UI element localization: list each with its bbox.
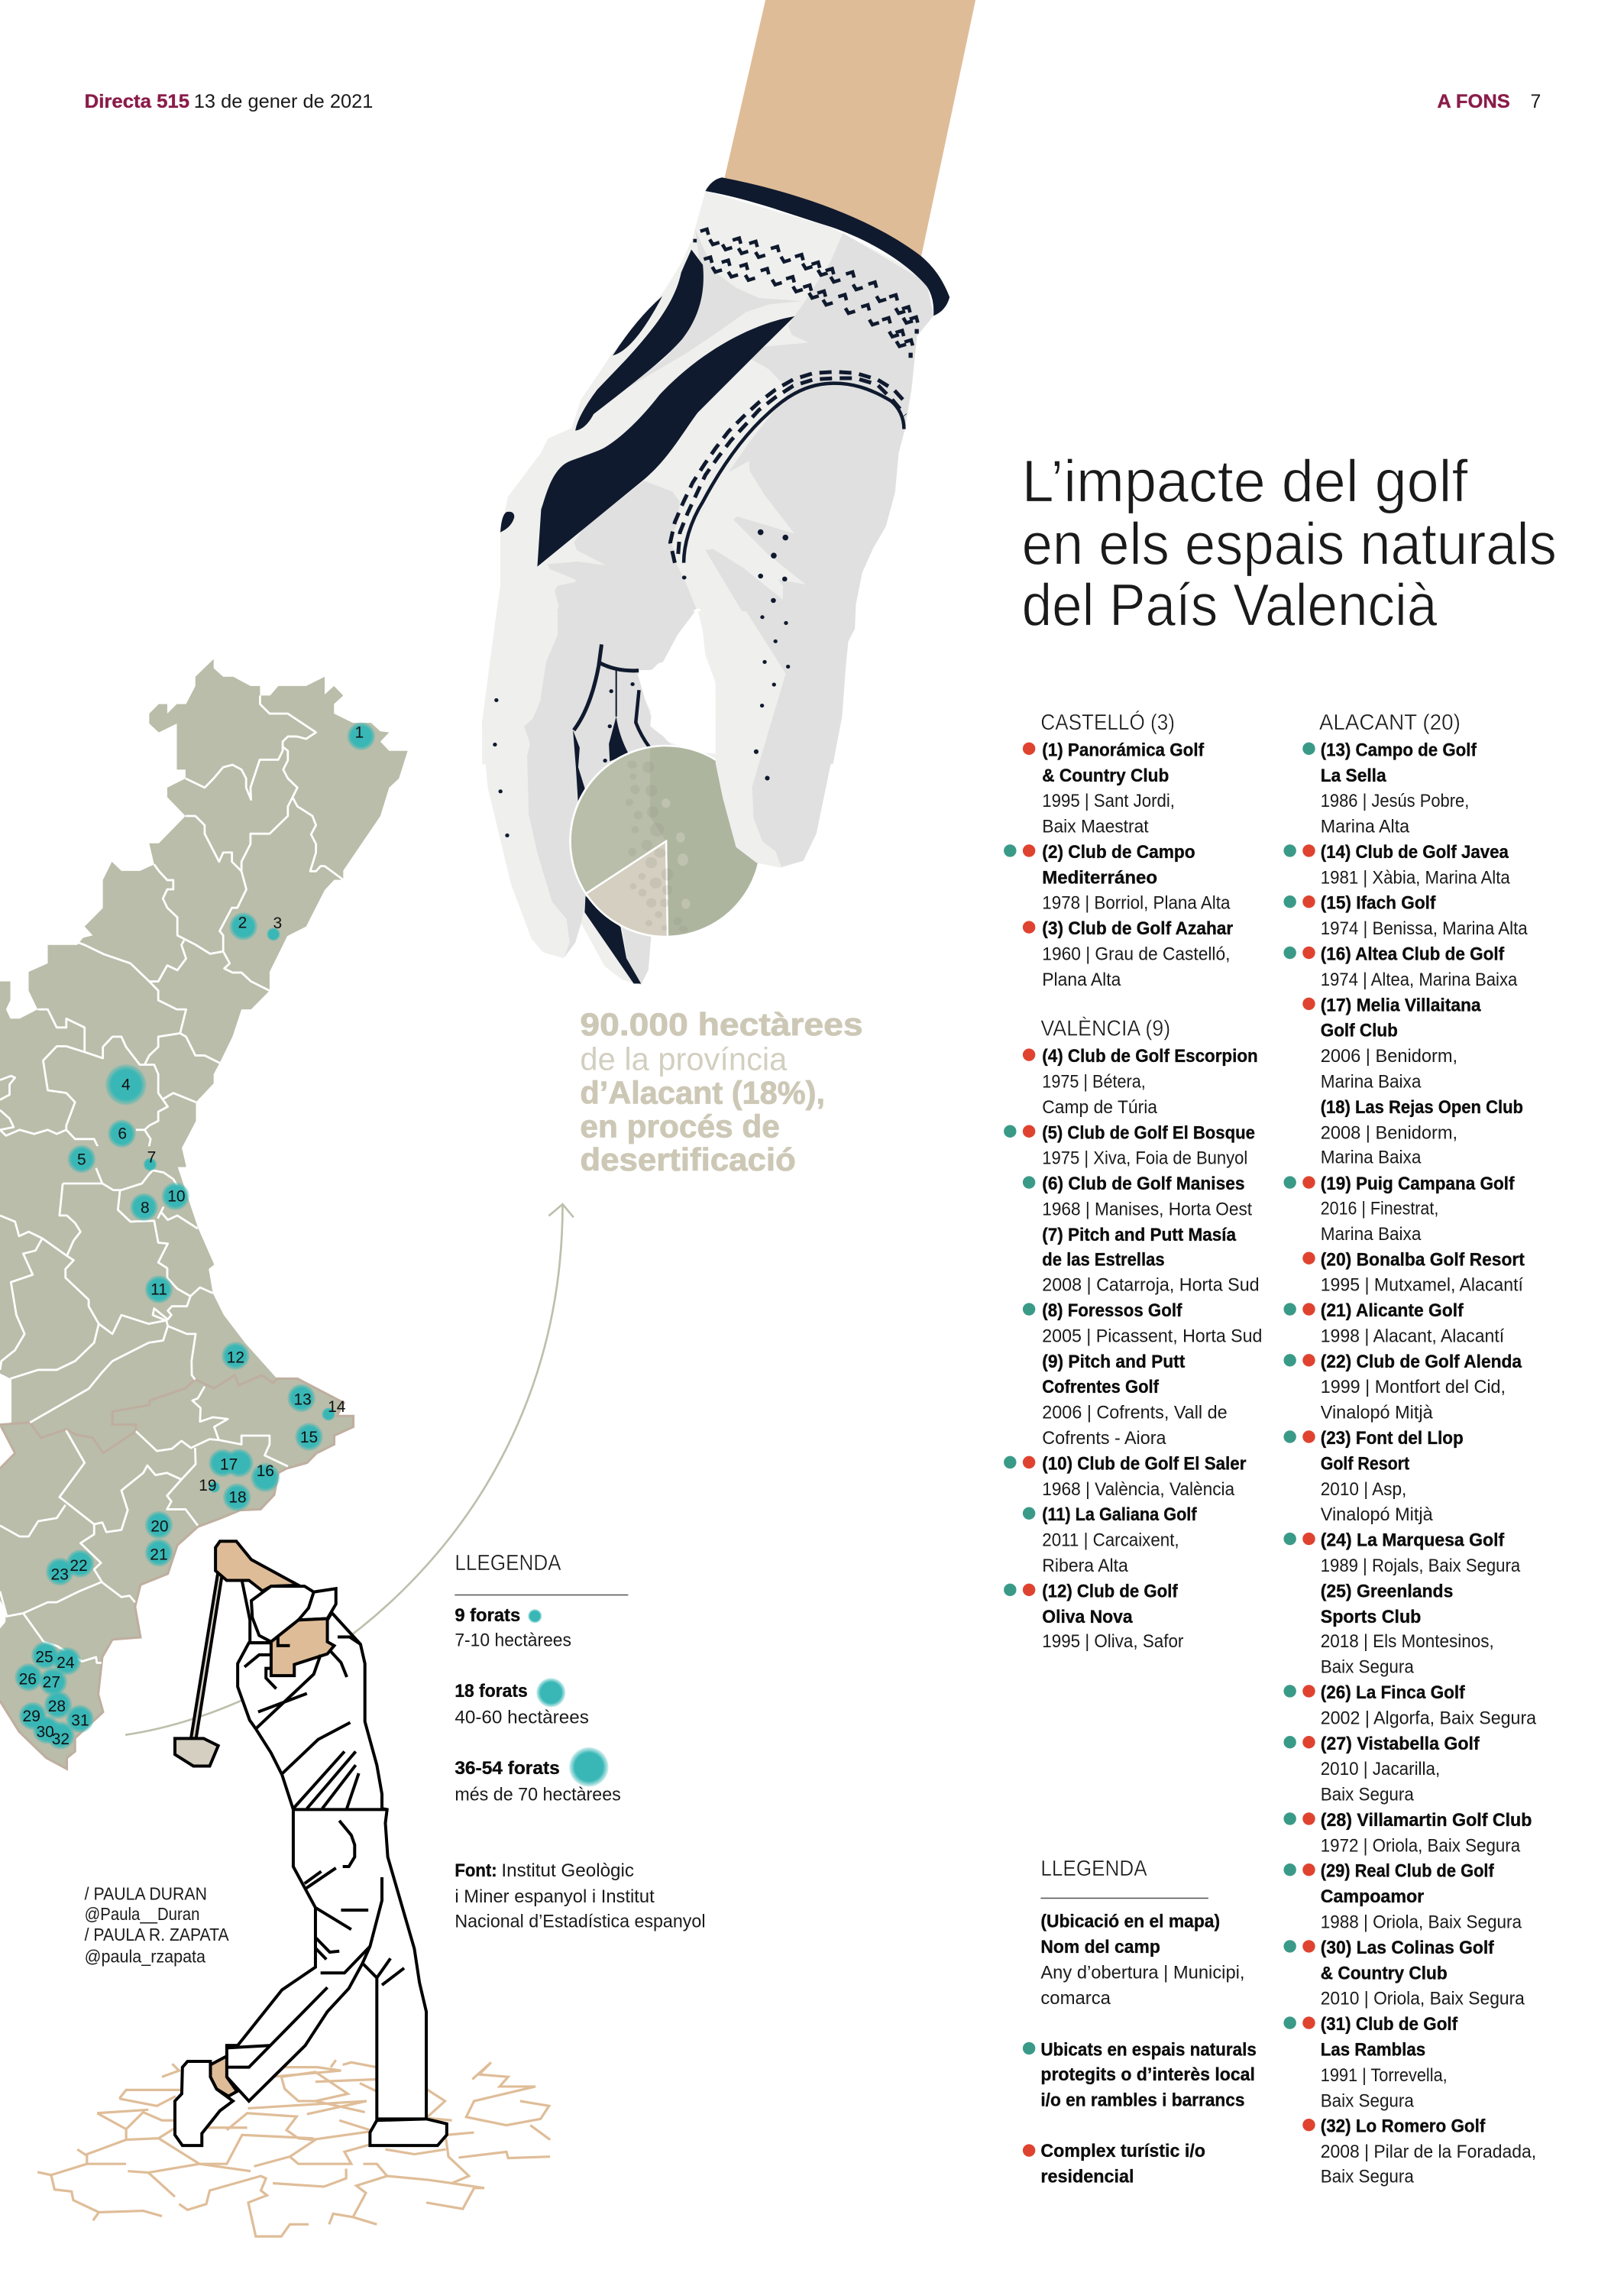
map course numbers: 32 (52, 1731, 70, 1748)
legend item: 36-54 holes: 36-54 forats (455, 1758, 560, 1779)
curved arrow from map to pie (125, 1204, 574, 1735)
title: del País Valencià (1022, 572, 1438, 639)
course 19: (19) Puig Campana Golf (1321, 1174, 1515, 1194)
glove palm shading (523, 461, 806, 754)
course 29: Campoamor (1321, 1886, 1424, 1907)
right finger over pie (698, 611, 854, 868)
course 17: (17) Melia Villaitana (1321, 995, 1481, 1015)
course 3: (3) Club de Golf Azahar (1042, 918, 1233, 939)
course 14: (14) Club de Golf Javea (1321, 842, 1509, 863)
map course numbers: 20 (150, 1517, 169, 1535)
title: en els espais naturals (1022, 510, 1557, 577)
course 14: 1981 | Xàbia, Marina Alta (1321, 867, 1510, 888)
course 29: (29) Real Club de Golf (1321, 1861, 1495, 1882)
course 29 (1283, 1861, 1522, 1933)
map course numbers: 15 (300, 1429, 318, 1446)
course 25: 2018 | Els Montesinos, (1321, 1631, 1494, 1652)
course 13: La Sella (1321, 766, 1386, 786)
callout: 90.000 hectàrees: desertificació (580, 1141, 796, 1177)
course 4: Camp de Túria (1042, 1097, 1158, 1118)
source note: Institut Geològic (501, 1860, 634, 1881)
map course numbers: 12 (227, 1349, 244, 1366)
title (1022, 447, 1557, 639)
pie golf-ball dimples (626, 761, 690, 933)
glove cuff, stripes and stitching (537, 177, 949, 567)
legend item: 9 holes (455, 1605, 571, 1650)
course 8: 2005 | Picassent, Horta Sud (1042, 1326, 1262, 1346)
course 27: (27) Vistabella Golf (1321, 1734, 1480, 1754)
course 20: 1995 | Mutxamel, Alacantí (1321, 1275, 1523, 1296)
course 9 (1042, 1352, 1228, 1449)
course 20: (20) Bonalba Golf Resort (1321, 1249, 1525, 1270)
course 9: 2006 | Cofrents, Vall de (1042, 1403, 1228, 1423)
glove navy tab (500, 512, 514, 533)
heading: Castelló: CASTELLÓ (3) (1040, 710, 1175, 735)
course 16: (16) Altea Club de Golf (1321, 944, 1505, 965)
course 15 (1283, 893, 1528, 939)
arm (724, 0, 975, 260)
course 5 (1004, 1122, 1255, 1169)
course 16: 1974 | Altea, Marina Baixa (1321, 970, 1518, 990)
source note: Font: (455, 1860, 497, 1881)
course 22: 1999 | Montfort del Cid, (1321, 1377, 1506, 1397)
callout: 90.000 hectàrees: d’Alacant (18%), (580, 1074, 825, 1110)
course 9: (9) Pitch and Putt (1042, 1352, 1185, 1372)
legend entry: tourist complex: Complex turístic i/o (1040, 2141, 1205, 2161)
course 32: 2008 | Pilar de la Foradada, (1321, 2142, 1536, 2162)
map course numbers: 2 (238, 915, 247, 932)
legend entry: tourist complex: residencial (1040, 2167, 1134, 2187)
map course numbers: 19 (199, 1477, 217, 1494)
course 32: (32) Lo Romero Golf (1321, 2116, 1486, 2137)
course 31: 1991 | Torrevella, (1321, 2065, 1448, 2086)
glove lower fingers (482, 611, 695, 985)
course 19: Marina Baixa (1321, 1224, 1422, 1245)
course 30 (1283, 1938, 1525, 2009)
course 2: 1978 | Borriol, Plana Alta (1042, 893, 1231, 914)
callout: 90.000 hectàrees: de la província (580, 1041, 788, 1077)
course 25: Sports Club (1321, 1607, 1421, 1627)
source note: i Miner espanyol i Institut (455, 1886, 655, 1907)
course 31: Baix Segura (1321, 2090, 1414, 2111)
map course numbers: 8 (141, 1200, 150, 1217)
map course numbers: 11 (150, 1281, 167, 1298)
course 12: 1995 | Oliva, Safor (1042, 1631, 1183, 1652)
course 24: (24) La Marquesa Golf (1321, 1530, 1505, 1551)
map course numbers: 27 (43, 1674, 60, 1692)
page header right (1437, 92, 1541, 112)
course 2 (1004, 842, 1231, 914)
course 17: Marina Baixa (1321, 1071, 1422, 1092)
heading: Alacant: ALACANT (20) (1319, 711, 1461, 735)
course 5: (5) Club de Golf El Bosque (1042, 1122, 1255, 1143)
course 3: 1960 | Grau de Castelló, (1042, 944, 1230, 965)
map course numbers: 30 (36, 1723, 54, 1740)
map course numbers: 17 (220, 1455, 238, 1473)
glove perforation dots (682, 529, 791, 687)
course 18: (18) Las Rejas Open Club (1321, 1097, 1523, 1118)
course 9: Cofrentes Golf (1042, 1377, 1160, 1397)
course 30: 2010 | Oriola, Baix Segura (1321, 1989, 1525, 2009)
course 32 (1302, 2116, 1536, 2187)
course 12: Oliva Nova (1042, 1607, 1133, 1627)
course 28: 1972 | Oriola, Baix Segura (1321, 1835, 1521, 1856)
course 7: 2008 | Catarroja, Horta Sud (1042, 1275, 1260, 1296)
map course numbers: 1 (355, 724, 364, 742)
course 7: de las Estrellas (1042, 1249, 1165, 1270)
legend entry: protected natural spaces: i/o en rambles i barrancs (1040, 2090, 1245, 2110)
course 13: Marina Alta (1321, 817, 1410, 837)
course 10 (1004, 1453, 1246, 1500)
course 16 (1283, 944, 1518, 990)
legend: course size: LLEGENDA (455, 1551, 561, 1575)
course 7 (1042, 1225, 1260, 1296)
legend entry format: Nom del camp (1040, 1937, 1160, 1957)
course 12 (1004, 1581, 1183, 1652)
source note (455, 1860, 706, 1932)
course 6: 1968 | Manises, Horta Oest (1042, 1199, 1252, 1219)
course 32: Baix Segura (1321, 2167, 1414, 2187)
course 10: (10) Club de Golf El Saler (1042, 1453, 1246, 1474)
course 17: Golf Club (1321, 1021, 1398, 1041)
map of the País Valencià (0, 659, 408, 1769)
map course numbers: 23 (51, 1566, 69, 1583)
credits: / PAULA DURAN (85, 1883, 207, 1903)
map course numbers: 24 (57, 1654, 75, 1672)
course 7: (7) Pitch and Putt Masía (1042, 1225, 1237, 1245)
credits (85, 1883, 229, 1966)
legend entry format: (Ubicació en el mapa) (1040, 1912, 1220, 1932)
source note: Nacional d’Estadística espanyol (455, 1912, 706, 1932)
course 1: 1995 | Sant Jordi, (1042, 791, 1175, 811)
callout: 90.000 hectàrees: 90.000 hectàrees (580, 1006, 863, 1042)
page header right: 7 (1531, 92, 1541, 112)
course 15: 1974 | Benissa, Marina Alta (1321, 918, 1528, 939)
map course numbers: 7 (147, 1149, 156, 1167)
page header left: Directa 515 (85, 92, 189, 112)
course 4: (4) Club de Golf Escorpion (1042, 1046, 1258, 1067)
illustration: golf glove holding pie chart (482, 0, 975, 985)
course 15: (15) Ifach Golf (1321, 893, 1436, 914)
course 27: 2010 | Jacarilla, (1321, 1759, 1440, 1779)
course 22: Vinalopó Mitjà (1321, 1403, 1433, 1423)
heading: València: VALÈNCIA (9) (1040, 1016, 1170, 1041)
course 21: 1998 | Alacant, Alacantí (1321, 1326, 1504, 1346)
course 14 (1283, 842, 1510, 888)
legend entry format (1040, 1912, 1245, 2009)
legend entry: protected natural spaces (1023, 2040, 1257, 2110)
course 19 (1283, 1174, 1515, 1245)
legend item: 9 holes: 7-10 hectàrees (455, 1630, 571, 1650)
course 11: Ribera Alta (1042, 1556, 1128, 1576)
course 31 (1283, 2014, 1458, 2111)
legend entry: tourist complex (1023, 2141, 1205, 2187)
legend item: 18 holes (455, 1678, 589, 1727)
map course numbers (19, 724, 364, 1748)
course 23: Golf Resort (1321, 1453, 1409, 1474)
course 31: (31) Club de Golf (1321, 2014, 1458, 2035)
callout: 90.000 hectàrees (580, 1006, 863, 1177)
course 22 (1283, 1352, 1522, 1423)
course 4 (1023, 1046, 1258, 1118)
map course numbers: 25 (35, 1648, 53, 1666)
course 19: 2016 | Finestrat, (1321, 1198, 1438, 1219)
course 10: 1968 | València, València (1042, 1479, 1235, 1500)
glove back shading (626, 229, 933, 764)
map golf course markers (15, 722, 375, 1750)
course 17: 2006 | Benidorm, (1321, 1046, 1457, 1067)
map course numbers: 22 (70, 1557, 88, 1575)
course 1 (1023, 740, 1205, 837)
course 1: Baix Maestrat (1042, 817, 1149, 837)
legend item: 36-54 holes: més de 70 hectàrees (455, 1785, 621, 1805)
pie chart: 18% of Alacant in desertification (571, 746, 761, 937)
map course numbers: 13 (293, 1391, 312, 1408)
map course numbers: 5 (77, 1151, 86, 1169)
course 13: (13) Campo de Golf (1321, 740, 1477, 760)
course 8 (1023, 1300, 1262, 1346)
course 25: (25) Greenlands (1321, 1581, 1453, 1601)
legend entry format: Any d’obertura | Municipi, (1040, 1962, 1245, 1983)
course 21: (21) Alicante Golf (1321, 1300, 1464, 1321)
course 13: 1986 | Jesús Pobre, (1321, 791, 1469, 811)
course 4: 1975 | Bétera, (1042, 1071, 1146, 1092)
course 31: Las Ramblas (1321, 2040, 1425, 2061)
legend item: 9 holes: 9 forats (455, 1605, 520, 1626)
map course numbers: 3 (273, 915, 282, 932)
course 3: Plana Alta (1042, 970, 1121, 990)
course 26: 2002 | Algorfa, Baix Segura (1321, 1708, 1537, 1728)
course 29: 1988 | Oriola, Baix Segura (1321, 1912, 1522, 1933)
legend item: 18 holes: 18 forats (455, 1681, 528, 1702)
course 8: (8) Foressos Golf (1042, 1300, 1182, 1321)
course 23: (23) Font del Llop (1321, 1428, 1464, 1449)
course 26: (26) La Finca Golf (1321, 1682, 1466, 1703)
course 20 (1302, 1249, 1525, 1296)
map course numbers: 6 (118, 1125, 127, 1142)
legend entry: protected natural spaces: Ubicats en espais naturals (1040, 2040, 1257, 2061)
course 18: 2008 | Benidorm, (1321, 1122, 1457, 1143)
map course numbers: 16 (257, 1462, 274, 1480)
course 27 (1283, 1734, 1480, 1805)
course 6 (1023, 1174, 1252, 1219)
illustration: golfer (175, 1541, 447, 2145)
course 28: (28) Villamartin Golf Club (1321, 1810, 1532, 1831)
course 11 (1023, 1504, 1197, 1576)
map course numbers: 18 (228, 1489, 247, 1507)
course 23: Vinalopó Mitjà (1321, 1504, 1433, 1525)
course 18 (1321, 1097, 1523, 1168)
credits: @paula_rzapata (85, 1946, 205, 1966)
crack pattern on ground (37, 2060, 550, 2236)
title: L’impacte del golf (1022, 447, 1468, 514)
course 25: Baix Segura (1321, 1657, 1414, 1678)
course 26 (1283, 1682, 1537, 1728)
course 18: Marina Baixa (1321, 1148, 1422, 1168)
course 23 (1283, 1428, 1464, 1525)
page header left (85, 92, 373, 112)
course 21 (1283, 1300, 1504, 1346)
course 11: 2011 | Carcaixent, (1042, 1530, 1179, 1551)
course 3 (1023, 918, 1233, 990)
course 30: & Country Club (1321, 1963, 1448, 1983)
legend entry format: comarca (1040, 1988, 1111, 2009)
map course numbers: 21 (150, 1546, 168, 1564)
glove base silhouette (482, 191, 934, 764)
course 2: (2) Club de Campo (1042, 842, 1195, 863)
course 22: (22) Club de Golf Alenda (1321, 1352, 1522, 1372)
course 28 (1283, 1810, 1532, 1856)
course 12: (12) Club de Golf (1042, 1581, 1179, 1601)
legend: course types (1023, 1857, 1257, 2187)
credits: / PAULA R. ZAPATA (85, 1925, 229, 1944)
credits: @Paula__Duran (85, 1904, 199, 1924)
course 11: (11) La Galiana Golf (1042, 1504, 1197, 1525)
legend item: 36-54 holes (455, 1747, 621, 1805)
legend: course types: LLEGENDA (1040, 1857, 1147, 1881)
map course numbers: 28 (48, 1698, 66, 1715)
page header left: 13 de gener de 2021 (194, 92, 373, 112)
map course numbers: 26 (19, 1671, 37, 1689)
callout: 90.000 hectàrees: en procés de (580, 1108, 780, 1144)
course 1: & Country Club (1042, 766, 1169, 786)
legend: course size (455, 1551, 628, 1805)
course 25 (1321, 1581, 1494, 1678)
course 13 (1302, 740, 1477, 837)
course 5: 1975 | Xiva, Foia de Bunyol (1042, 1148, 1247, 1169)
legend entry: protected natural spaces: protegits o d’interès local (1040, 2064, 1255, 2085)
map course numbers: 4 (121, 1076, 131, 1093)
course 27: Baix Segura (1321, 1785, 1414, 1805)
map course numbers: 14 (328, 1398, 346, 1416)
map course numbers: 10 (167, 1187, 186, 1205)
course 6: (6) Club de Golf Manises (1042, 1174, 1245, 1194)
course 30: (30) Las Colinas Golf (1321, 1938, 1495, 1958)
course 2: Mediterráneo (1042, 867, 1157, 888)
map course numbers: 29 (23, 1708, 40, 1725)
course 17 (1302, 995, 1481, 1092)
course 24 (1283, 1530, 1521, 1576)
legend item: 18 holes: 40-60 hectàrees (455, 1707, 589, 1727)
course 24: 1989 | Rojals, Baix Segura (1321, 1556, 1521, 1576)
course 1: (1) Panorámica Golf (1042, 740, 1205, 760)
course 23: 2010 | Asp, (1321, 1479, 1406, 1500)
map course numbers: 31 (71, 1712, 89, 1730)
course 9: Cofrents - Aiora (1042, 1428, 1166, 1449)
page header right: A FONS (1437, 92, 1510, 112)
